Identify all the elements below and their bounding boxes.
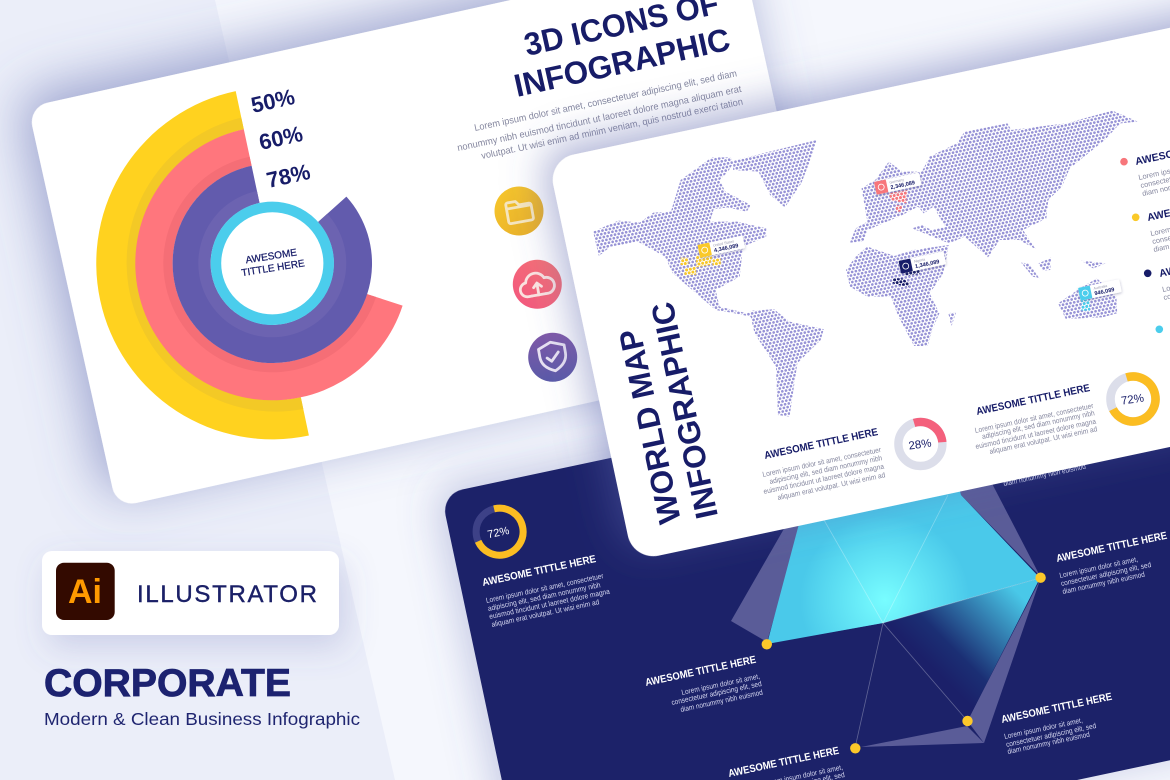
text block: right node: Lorem ipsum dolor sit amet, — [1059, 555, 1139, 580]
text block: right node: consectetuer adipiscing elit, sed — [1060, 560, 1152, 588]
text block: 28%: Lorem ipsum dolor sit amet, consectetuer — [762, 445, 882, 479]
text block: dark left: Lorem ipsum dolor sit amet, consectetuer — [485, 571, 605, 605]
text block: right node — [1055, 530, 1168, 596]
text block: 72%: euismod tincidunt ut laoreet dolore magna — [975, 416, 1097, 451]
map tag: Germany: 2,346,089 — [890, 180, 916, 191]
text block: 72% — [974, 382, 1098, 456]
text block: left node: AWESOME TITTLE HERE — [644, 654, 757, 689]
dotted world map — [594, 111, 1138, 416]
text block: dark left: euismod tincidunt ut laoreet dolore magna — [488, 586, 611, 621]
map tag: United States: 4,346,089 — [714, 243, 739, 254]
percent labels: 50% — [249, 84, 297, 118]
map tag: Germany — [874, 172, 922, 195]
text block: left node: consectetuer adipiscing elit, sed — [671, 679, 762, 707]
text block: lower right node: Lorem ipsum dolor sit amet, — [1003, 716, 1083, 741]
text block: left node: diam nonummy nibh euismod — [680, 688, 764, 714]
panel: radial chart card — [28, 0, 829, 507]
text block: 28%: adipiscing elit, sed diam nonummy nibh — [769, 453, 883, 486]
text block: dark left: adipiscing elit, sed diam nonummy nibh — [487, 580, 601, 613]
text block: lower right node: diam nonummy nibh euismod — [1007, 730, 1091, 756]
map tag: Australia: Australia — [1093, 284, 1108, 291]
heading: world map: WORLD MAP — [612, 326, 688, 527]
text block: 72%: adipiscing elit, sed diam nonummy nibh — [981, 408, 1095, 441]
body text: nonummy nibh euismod tincidunt ut laoreet dolore magna aliquam erat — [456, 84, 743, 154]
badge: Illustrator: ILLUSTRATOR — [137, 581, 317, 608]
text block: lower right node — [1000, 691, 1113, 756]
red ring 60% — [135, 129, 403, 400]
heading: 3D icons: INFOGRAPHIC — [511, 21, 733, 104]
donut 72% dark: 72% — [486, 525, 511, 541]
center label: TITTLE HERE — [241, 258, 306, 279]
icon: cloud upload — [513, 260, 562, 309]
percent labels: 78% — [264, 159, 313, 193]
map tag: Nigeria: 1,346,089 — [915, 259, 940, 270]
text block: 28%: aliquam erat volutpat. Ut wisi enim ad — [777, 470, 886, 502]
text block: left node: Lorem ipsum dolor sit amet, — [681, 672, 761, 697]
map tag: United States: United States — [713, 239, 735, 248]
map tag: Nigeria: Nigeria — [914, 257, 926, 264]
heading: world map — [612, 299, 725, 527]
badge: Illustrator — [42, 551, 339, 635]
text block: lower right node: AWESOME TITTLE HERE — [1000, 691, 1113, 726]
icon: folder — [494, 186, 544, 236]
yellow ring 50% — [96, 91, 309, 439]
donut 28% — [893, 417, 947, 471]
text block: 72%: Lorem ipsum dolor sit amet, consectetuer — [974, 401, 1095, 435]
crystal diagram — [731, 450, 1046, 754]
donut 72% dark — [472, 504, 527, 560]
map tag: United States — [698, 235, 745, 258]
icon: Ai logo: Ai — [68, 573, 102, 611]
purple ring 78% — [173, 166, 372, 363]
body text: volutpat. Ut wisi enim ad minim veniam, quis nostrud exerci tation — [480, 97, 744, 162]
text block: 72%: aliquam erat volutpat. Ut wisi enim ad — [989, 424, 1098, 456]
center label — [239, 246, 306, 279]
map tag: Australia: 946,089 — [1094, 287, 1115, 297]
center label: AWESOME — [245, 247, 298, 266]
text block: lower right node: consectetuer adipiscing elit, sed — [1005, 721, 1097, 749]
body text: Lorem ipsum dolor sit amet, consectetuer adipiscing elit, sed diam — [473, 68, 738, 134]
map tag: Australia — [1078, 279, 1122, 301]
text block: dark left — [481, 553, 611, 629]
percent labels: 60% — [257, 121, 305, 155]
text block: 72%: AWESOME TITTLE HERE — [975, 382, 1091, 418]
donut 72% light — [1105, 371, 1161, 427]
panel: world map card — [546, 0, 1170, 561]
text block: 28%: euismod tincidunt ut laoreet dolore magna — [763, 461, 885, 496]
radial chart — [96, 91, 403, 439]
icon: Ai logo — [56, 563, 115, 620]
map tag: Nigeria — [898, 251, 946, 274]
donut 72% light: 72% — [1120, 392, 1145, 408]
text block: 28% — [762, 426, 886, 502]
map tag: Germany: Germany — [889, 178, 905, 185]
panel: navy crystal card — [441, 307, 1170, 780]
text block: left node — [644, 654, 764, 714]
text block: 28%: AWESOME TITTLE HERE — [763, 426, 879, 462]
cyan ring — [216, 207, 329, 320]
legend — [1120, 130, 1170, 333]
text block: hidden top node: diam nonummy nibh euismod — [1003, 462, 1087, 488]
percent labels — [249, 84, 313, 193]
donut 28%: 28% — [908, 437, 932, 453]
text block: dark left: aliquam erat volutpat. Ut wisi enim ad — [491, 597, 600, 629]
text block: dark left: AWESOME TITTLE HERE — [481, 553, 597, 589]
heading: world map: INFOGRAPHIC — [644, 299, 725, 522]
subtitle: Modern & Clean Business Infographic — [44, 709, 360, 729]
title: Corporate: CORPORATE — [44, 662, 291, 705]
text block: bottom node: AWESOME TITTLE HERE — [727, 745, 840, 780]
icon: shield — [528, 333, 577, 382]
text block: right node: diam nonummy nibh euismod — [1062, 570, 1146, 596]
